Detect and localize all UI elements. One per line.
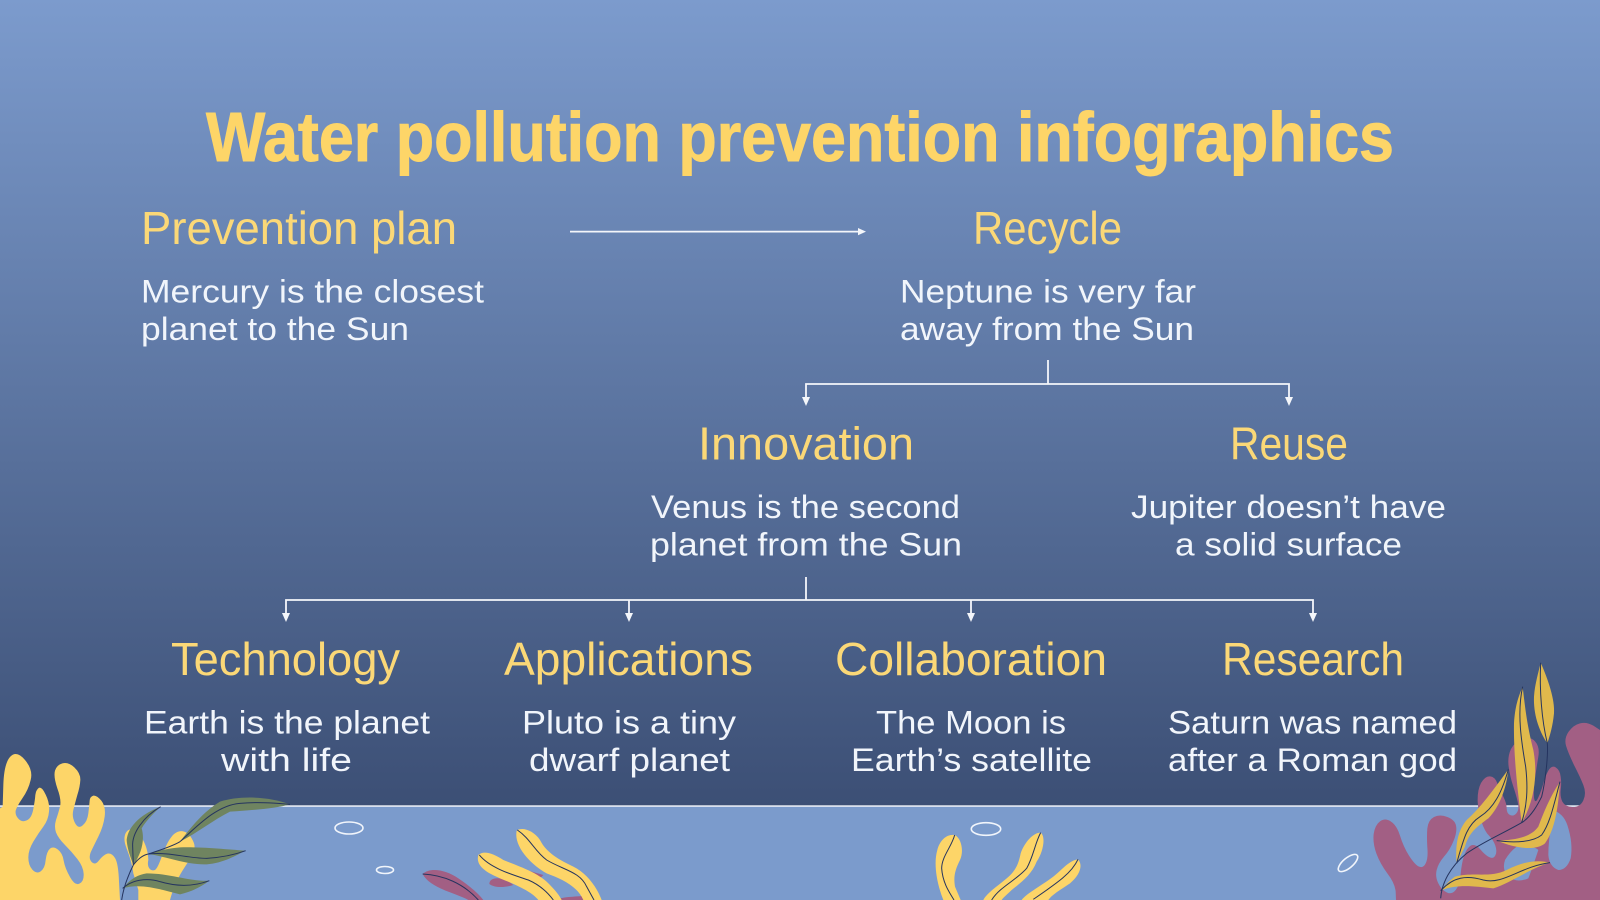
block: technology: Earth is the planet bbox=[144, 704, 430, 740]
title: Water pollution prevention infographics bbox=[206, 98, 1394, 176]
block: innovation: planet from the Sun bbox=[650, 527, 962, 563]
connector: recycle to innovation and reuse bbox=[802, 360, 1293, 406]
block: innovation bbox=[650, 418, 962, 563]
block: recycle: away from the Sun bbox=[900, 311, 1194, 347]
waterline bbox=[0, 805, 1600, 807]
block: collaboration: Earth’s satellite bbox=[851, 742, 1092, 778]
block: prevention plan: Prevention plan bbox=[141, 202, 457, 254]
block: research: Research bbox=[1222, 633, 1404, 685]
block: technology bbox=[144, 633, 430, 778]
block: collaboration: The Moon is bbox=[876, 704, 1066, 740]
block: technology: with life bbox=[220, 742, 352, 778]
block: collaboration bbox=[835, 633, 1107, 778]
icon: left seaweed bbox=[423, 829, 602, 900]
block: technology: Technology bbox=[171, 633, 400, 685]
block: innovation: Innovation bbox=[698, 418, 914, 470]
icon: left coral and leaves bbox=[0, 754, 290, 900]
block: collaboration: Collaboration bbox=[835, 633, 1107, 685]
block: prevention plan bbox=[141, 202, 484, 347]
block: reuse: Jupiter doesn’t have bbox=[1131, 489, 1446, 525]
block: research: Saturn was named bbox=[1168, 704, 1457, 740]
block: research bbox=[1168, 633, 1457, 778]
block: applications: dwarf planet bbox=[529, 742, 730, 778]
block: recycle bbox=[900, 202, 1196, 347]
block: innovation: Venus is the second bbox=[651, 489, 960, 525]
block: reuse: Reuse bbox=[1230, 418, 1348, 470]
icon: right coral and leaves bbox=[1373, 663, 1600, 900]
block: recycle: Recycle bbox=[973, 202, 1122, 254]
icon: right bubbles bbox=[971, 823, 1360, 875]
block: recycle: Neptune is very far bbox=[900, 274, 1196, 310]
connector: innovation to four branches bbox=[282, 577, 1317, 622]
block: prevention plan: Mercury is the closest bbox=[141, 274, 484, 310]
block: applications bbox=[504, 633, 753, 778]
icon: center seaweed bbox=[936, 833, 1081, 900]
block: prevention plan: planet to the Sun bbox=[141, 311, 409, 347]
block: reuse: a solid surface bbox=[1175, 527, 1402, 563]
block: applications: Applications bbox=[504, 633, 753, 685]
block: research: after a Roman god bbox=[1168, 742, 1457, 778]
water band bbox=[0, 806, 1600, 900]
arrow: prevention plan to recycle bbox=[570, 228, 866, 235]
block: reuse bbox=[1131, 418, 1446, 563]
block: applications: Pluto is a tiny bbox=[522, 704, 736, 740]
icon: left bubbles bbox=[335, 822, 394, 874]
